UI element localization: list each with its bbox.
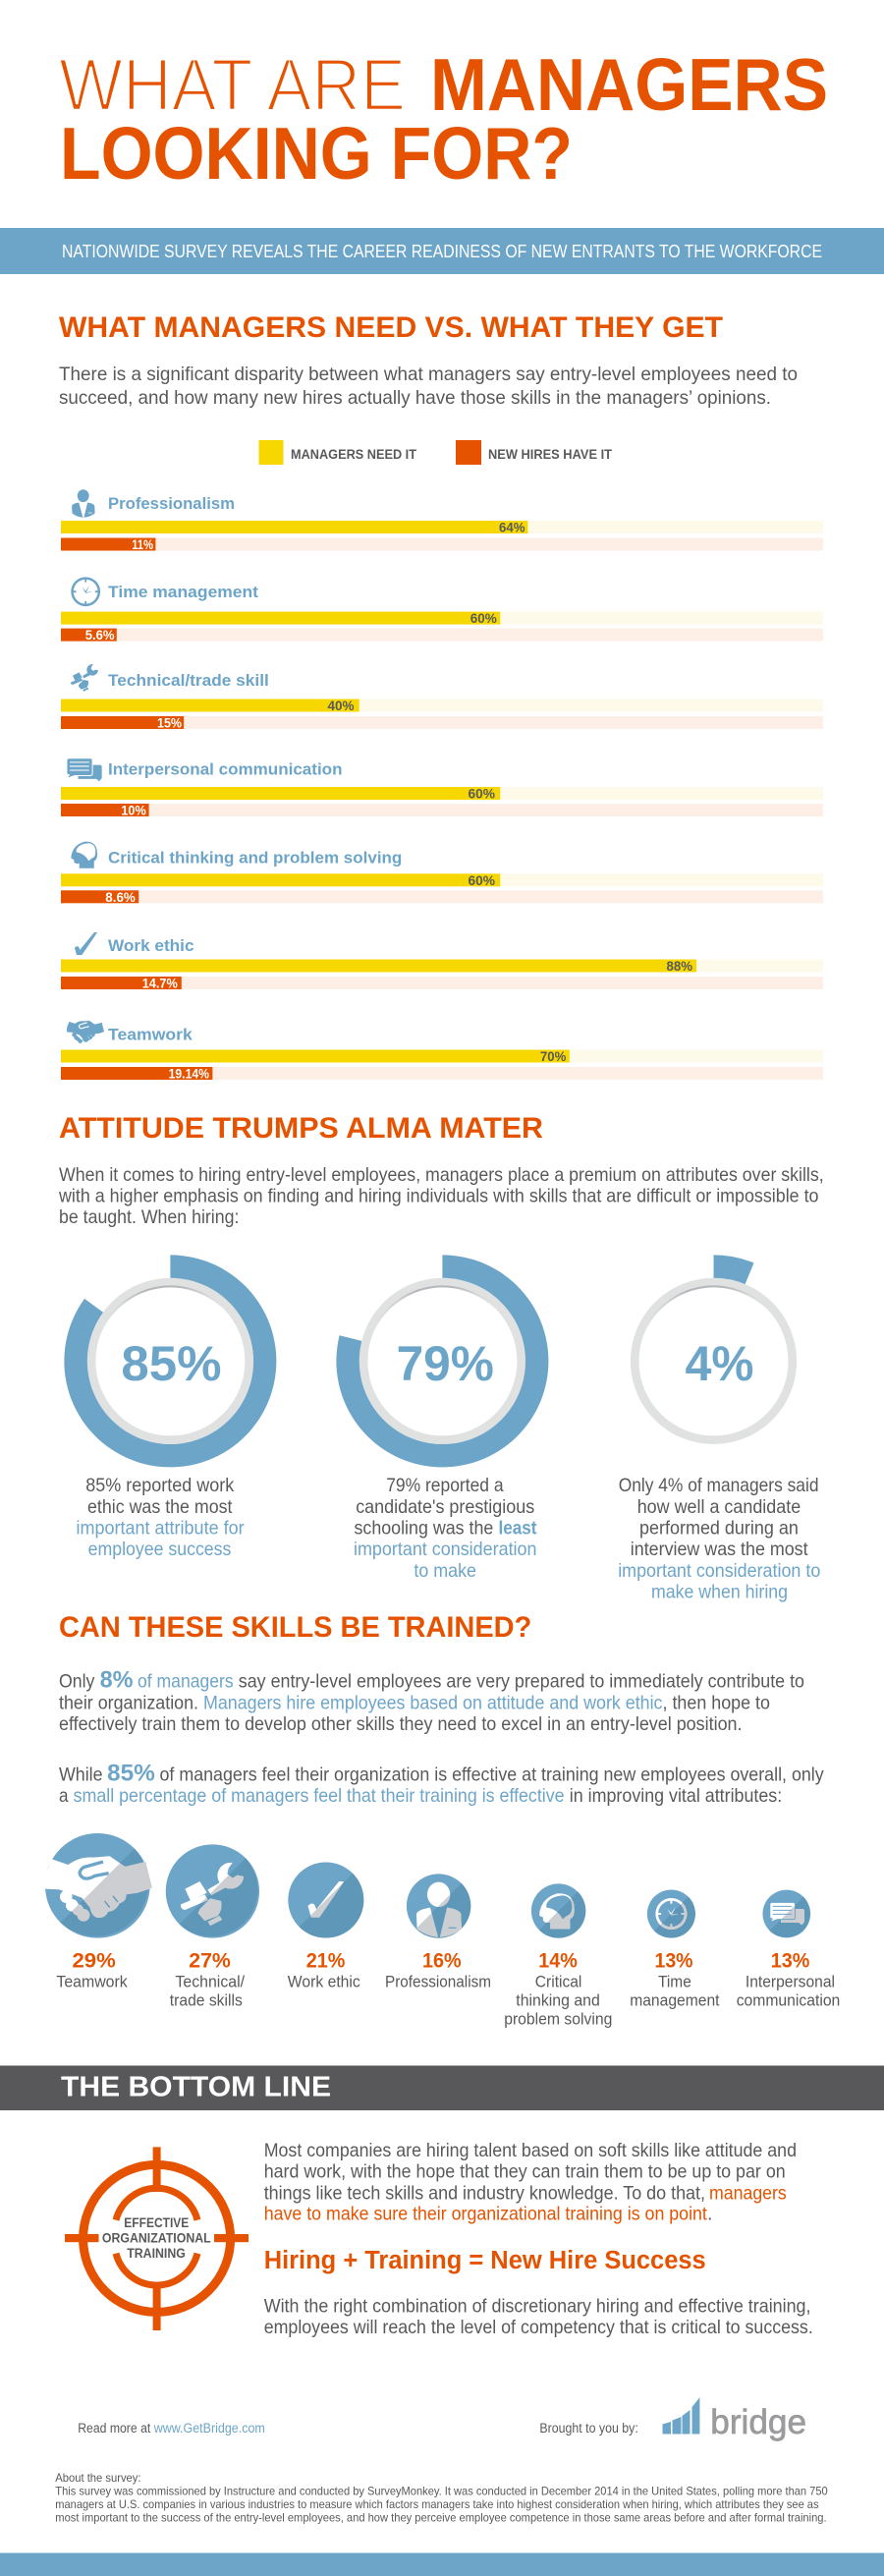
- intro paragraph: succeed, and how many new hires actually have those skills in the managers’ opinions.: [59, 387, 771, 409]
- title: WHAT ARE: [59, 43, 406, 126]
- caption: 79 percent: candidate's prestigious: [356, 1496, 534, 1518]
- stat: critical thinking: Critical: [535, 1974, 581, 1991]
- bottom line paragraph: have to make sure their organizational training is on point: [264, 2204, 707, 2225]
- row: work ethic: 88%: [666, 958, 693, 974]
- paragraph: 85 percent: 85%: [107, 1760, 155, 1786]
- heading: attitude: ATTITUDE TRUMPS ALMA MATER: [59, 1112, 543, 1145]
- caption: 79 percent: 79% reported a: [386, 1475, 504, 1496]
- row: technical skill: [61, 664, 823, 731]
- caption: 85 percent: [77, 1475, 245, 1560]
- title: LOOKING FOR?: [60, 112, 573, 195]
- donut: 4 percent: [635, 1255, 793, 1440]
- footer band: [0, 2552, 884, 2576]
- row: professionalism: 64%: [499, 519, 525, 534]
- conclusion paragraph: employees will reach the level of competency that is critical to success.: [264, 2317, 813, 2338]
- target icon: [65, 2147, 249, 2330]
- conclusion paragraph: [264, 2295, 813, 2338]
- title: [59, 43, 828, 195]
- stat: professionalism: Professionalism: [385, 1974, 491, 1991]
- row: critical thinking: [61, 842, 823, 905]
- caption: 79 percent: important consideration: [354, 1539, 536, 1560]
- row: interpersonal communication: Interpersonal communication: [108, 760, 342, 778]
- caption: 4 percent: how well a candidate: [637, 1496, 801, 1518]
- paragraph: 8 percent: Managers hire employees based on attitude and work ethic: [203, 1692, 663, 1713]
- icon: handshake circle: [45, 1833, 152, 1938]
- stat: professionalism: 16%: [422, 1950, 462, 1973]
- row: professionalism: 11%: [132, 536, 153, 552]
- legend: NEW HIRES HAVE IT: [488, 447, 613, 462]
- attitude paragraph: When it comes to hiring entry-level employees, managers place a premium on attributes over skills,: [59, 1164, 824, 1186]
- stat: interpersonal communication: Interpersonal: [746, 1974, 835, 1991]
- intro paragraph: There is a significant disparity between what managers say entry-level employees need to: [59, 364, 798, 385]
- about the survey: This survey was commissioned by Instructure and conducted by SurveyMonkey. It was conducted in December 2014 in the United States, polling more than 750: [55, 2485, 828, 2498]
- read more: www.GetBridge.com: [153, 2421, 265, 2436]
- icon: speech circle: [762, 1890, 810, 1937]
- row: technical skill: 15%: [157, 715, 182, 731]
- paragraph: 85 percent: of managers feel their organization is effective at training new employees overall, only: [159, 1764, 824, 1785]
- icon: wrench: [71, 664, 98, 692]
- bottom line paragraph: hard work, with the hope that they can train them to be up to par on: [264, 2161, 786, 2183]
- row: teamwork: [61, 1021, 823, 1081]
- caption: 79 percent: least: [499, 1517, 537, 1539]
- about the survey: managers at U.S. companies in various industries to measure which factors managers take into highest consideration when hiring, which attributes they see as: [55, 2497, 819, 2511]
- stat: critical thinking: problem solving: [504, 2011, 612, 2029]
- target icon: ORGANIZATIONAL: [102, 2231, 211, 2246]
- donut: 4 percent: 4%: [686, 1336, 754, 1391]
- paragraph: 8 percent: , then hope to: [662, 1692, 770, 1713]
- caption: 85 percent: employee success: [88, 1539, 232, 1560]
- caption: 79 percent: schooling was the: [354, 1517, 493, 1539]
- caption: 85 percent: important attribute for: [77, 1517, 245, 1539]
- stat: professionalism: [385, 1874, 491, 1991]
- stat: interpersonal communication: [737, 1890, 840, 2010]
- subtitle band: [0, 228, 884, 274]
- attitude paragraph: with a higher emphasis on finding and hiring individuals with skills that are difficult or impossible to: [58, 1185, 819, 1206]
- legend: [259, 440, 613, 465]
- stat: interpersonal communication: 13%: [771, 1950, 810, 1973]
- paragraph: 85 percent: While: [59, 1764, 102, 1785]
- title: MANAGERS: [430, 43, 828, 126]
- row: teamwork: Teamwork: [108, 1025, 193, 1043]
- caption: 4 percent: interview was the most: [631, 1539, 808, 1560]
- about the survey: [55, 2471, 828, 2525]
- stat: technical skills: trade skills: [170, 1992, 243, 2010]
- row: technical skill: 40%: [328, 698, 355, 713]
- row: work ethic: 14.7%: [142, 975, 178, 990]
- caption: 85 percent: ethic was the most: [87, 1496, 233, 1518]
- icon: head circle: [531, 1883, 585, 1938]
- donut: 85 percent: 85%: [121, 1336, 222, 1391]
- paragraph: 8 percent: their organization.: [59, 1692, 198, 1713]
- about the survey: About the survey:: [55, 2471, 140, 2485]
- stat: time management: management: [630, 1992, 720, 2010]
- paragraph: 8 percent: [59, 1667, 804, 1735]
- paragraph: 85 percent: in improving vital attributes:: [570, 1785, 782, 1807]
- row: time management: [61, 577, 823, 643]
- caption: 79 percent: to make: [414, 1560, 476, 1582]
- icon: clock: [71, 577, 100, 606]
- attitude paragraph: be taught. When hiring:: [59, 1206, 239, 1228]
- stat: work ethic: 21%: [306, 1950, 346, 1973]
- stat: time management: [630, 1890, 720, 2010]
- caption: 4 percent: [618, 1475, 820, 1602]
- intro paragraph: [59, 364, 798, 409]
- row: critical thinking: 8.6%: [105, 889, 136, 905]
- icon: handshake: [67, 1021, 104, 1043]
- icon: wrench circle: [166, 1844, 259, 1938]
- caption: 85 percent: 85% reported work: [85, 1475, 234, 1496]
- caption: 4 percent: make when hiring: [651, 1581, 788, 1602]
- read more: Read more at: [78, 2421, 151, 2436]
- legend: MANAGERS NEED IT: [291, 447, 417, 462]
- row: interpersonal communication: 60%: [468, 786, 496, 802]
- caption: 4 percent: Only 4% of managers said: [619, 1475, 819, 1496]
- stat: teamwork: Teamwork: [56, 1974, 128, 1991]
- icon: person: [72, 489, 95, 518]
- callout: hiring plus training: Hiring + Training = New Hire Success: [264, 2247, 706, 2274]
- row: work ethic: Work ethic: [108, 936, 194, 955]
- stat: critical thinking: [504, 1883, 612, 2029]
- paragraph: 8 percent: effectively train them to develop other skills they need to excel in an entry-level position.: [59, 1713, 743, 1735]
- row: professionalism: Professionalism: [108, 494, 235, 513]
- donut: 85 percent: [64, 1255, 276, 1467]
- icon: check circle: [288, 1863, 363, 1938]
- stat: time management: Time: [658, 1974, 691, 1991]
- caption: 4 percent: performed during an: [639, 1517, 799, 1539]
- bar chart: needs vs has: [61, 489, 823, 1082]
- paragraph: 8 percent: 8%: [100, 1667, 134, 1694]
- row: time management: Time management: [108, 583, 258, 601]
- heading: trained: CAN THESE SKILLS BE TRAINED?: [59, 1611, 531, 1644]
- stat: work ethic: Work ethic: [288, 1974, 360, 1991]
- stat: critical thinking: 14%: [538, 1950, 578, 1973]
- target icon: TRAINING: [127, 2246, 186, 2261]
- row: technical skill: Technical/trade skill: [108, 671, 269, 690]
- sponsor credit: Brought to you by:: [539, 2421, 638, 2436]
- row: interpersonal communication: [61, 758, 823, 817]
- bottom line paragraph: managers: [709, 2182, 787, 2204]
- stat: work ethic: [288, 1863, 363, 1991]
- icon: head: [71, 842, 97, 868]
- bottom line paragraph: .: [707, 2204, 712, 2225]
- paragraph: 8 percent: say entry-level employees are very prepared to immediately contribute to: [239, 1671, 804, 1693]
- row: critical thinking: 60%: [468, 872, 496, 888]
- read more: [78, 2421, 265, 2436]
- stat: teamwork: 29%: [73, 1950, 116, 1973]
- stat: interpersonal communication: communication: [737, 1992, 840, 2010]
- heading: what managers need: WHAT MANAGERS NEED VS. WHAT THEY GET: [59, 311, 723, 344]
- attitude paragraph: [58, 1164, 824, 1228]
- bridge logo: bridge: [710, 2403, 806, 2441]
- paragraph: 85 percent: [59, 1760, 824, 1807]
- paragraph: 8 percent: Only: [59, 1671, 95, 1693]
- icon: speech bubbles: [67, 758, 102, 781]
- bottom line band: [0, 2065, 884, 2110]
- bottom line band: THE BOTTOM LINE: [61, 2072, 331, 2103]
- donut: 79 percent: [336, 1255, 548, 1467]
- stat: time management: 13%: [654, 1950, 693, 1973]
- stat: teamwork: [45, 1833, 152, 1991]
- row: interpersonal communication: 10%: [121, 802, 146, 817]
- stat: technical skills: [166, 1844, 259, 2010]
- row: teamwork: 70%: [540, 1048, 567, 1064]
- caption: 4 percent: important consideration to: [618, 1560, 820, 1582]
- about the survey: most important to the success of the entry-level employees, and how they perceive employee competence in those same areas before and after formal training.: [55, 2511, 827, 2525]
- row: teamwork: 19.14%: [169, 1065, 209, 1081]
- paragraph: 85 percent: a: [59, 1785, 69, 1807]
- stat: critical thinking: thinking and: [516, 1992, 600, 2010]
- icon: check mark: [75, 932, 97, 955]
- row: professionalism: [61, 489, 823, 552]
- bottom line paragraph: [264, 2140, 797, 2225]
- conclusion paragraph: With the right combination of discretionary hiring and effective training,: [264, 2295, 811, 2317]
- bottom line paragraph: Most companies are hiring talent based on soft skills like attitude and: [264, 2140, 797, 2161]
- paragraph: 8 percent: of managers: [138, 1671, 234, 1693]
- row: time management: 60%: [470, 610, 497, 626]
- stat: technical skills: Technical/: [175, 1974, 245, 1991]
- stat: technical skills: 27%: [189, 1950, 231, 1973]
- bridge logo: [662, 2397, 806, 2441]
- donut: 79 percent: 79%: [397, 1336, 494, 1391]
- target icon: EFFECTIVE: [124, 2215, 189, 2230]
- icon: person circle: [407, 1874, 470, 1938]
- paragraph: 85 percent: small percentage of managers feel that their training is effective: [74, 1785, 565, 1807]
- bottom line paragraph: things like tech skills and industry knowledge. To do that,: [264, 2182, 705, 2204]
- row: critical thinking: Critical thinking and problem solving: [108, 848, 402, 867]
- row: work ethic: [61, 932, 823, 990]
- icon: clock circle: [647, 1890, 695, 1938]
- row: time management: 5.6%: [85, 627, 115, 643]
- caption: 79 percent: [354, 1475, 537, 1582]
